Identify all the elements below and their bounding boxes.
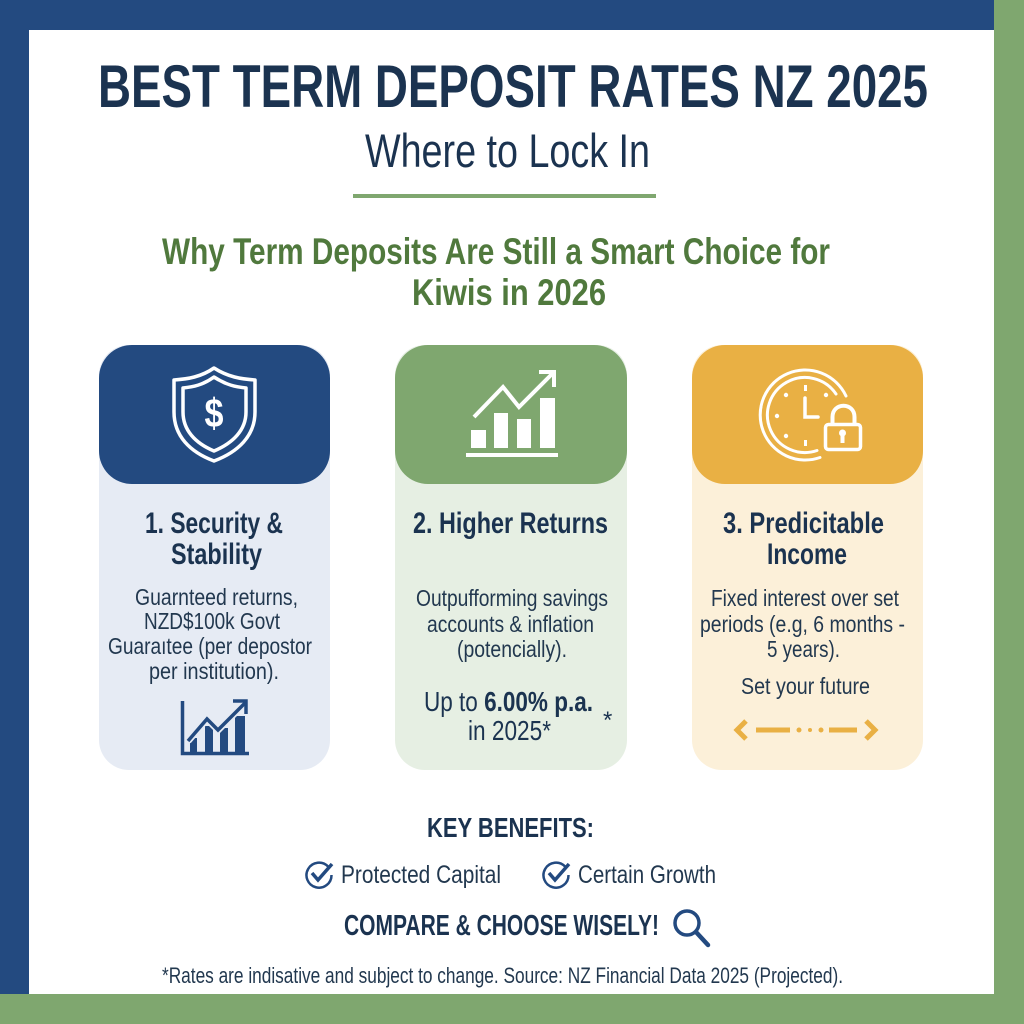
section heading: Why Term Deposits Are Still a Smart Choice for [162,231,830,272]
icon: clock and padlock [760,370,860,460]
text: income description: 5 years). [767,636,840,662]
icon: shield with dollar [174,368,255,461]
text: income description: Set your future [741,673,870,699]
benefit: certain growth [544,861,716,889]
text: returns description [416,585,608,662]
text: security description: Guarnteed returns, [135,584,298,610]
text: security description: NZD$100k Govt [144,608,280,634]
benefit: certain growth: Certain Growth [578,861,716,889]
benefit: protected capital: Protected Capital [341,861,501,889]
heading: predictable income [723,507,884,571]
callout: rate: * [603,707,612,734]
heading: key benefits: KEY BENEFITS: [427,812,594,843]
text: returns description: Outpufforming savings [416,585,608,611]
text: security description [108,584,312,684]
text: security description: Guaraıtee (per depostor [108,633,312,659]
panel: security and stability [99,345,330,770]
icon: two-way timeline arrow [737,721,875,739]
section heading: Kiwis in 2026 [412,272,606,313]
call to action: COMPARE & CHOOSE WISELY! [344,910,659,942]
text: income description: Fixed interest over set [711,585,900,611]
heading: higher returns: 2. Higher Returns [413,507,608,540]
text: income description [700,585,905,699]
heading: security and stability: Stability [171,538,262,571]
callout: rate: Up to 6.00% p.a. [424,686,593,717]
heading: predictable income: 3. Predicitable [723,507,884,540]
panel: predictable income [692,345,923,770]
heading: security and stability: 1. Security & [145,507,283,540]
icon: magnifying glass [675,911,708,945]
section heading [162,231,830,313]
text: returns description: accounts & inflation [427,611,594,637]
text: security description: per institution). [149,658,279,684]
icon: small growth chart [182,701,249,754]
subtitle: Where to Lock In [365,124,650,177]
text: income description: periods (e.g, 6 months - [700,611,905,637]
text: returns description: (potencially). [457,636,567,662]
footnote: *Rates are indisative and subject to change. Source: NZ Financial Data 2025 (Projected). [162,963,843,988]
icon: shield with dollar: $ [204,390,224,436]
heading: security and stability [145,507,283,571]
callout: rate [424,686,612,746]
panel: higher returns [395,345,627,770]
heading: predictable income: Income [767,538,847,571]
callout: rate: in 2025* [468,715,551,746]
icon: bar chart with arrow [466,372,558,457]
